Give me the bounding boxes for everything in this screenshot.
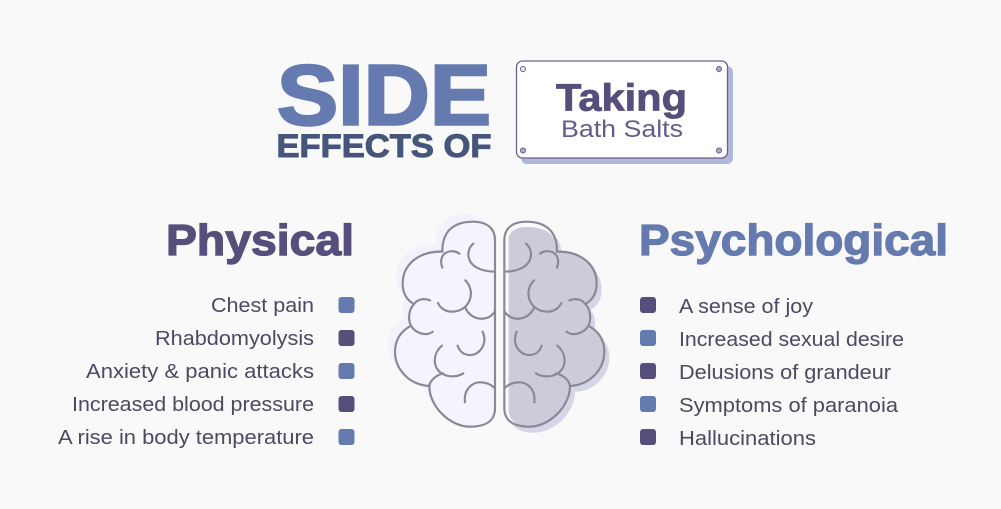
sign card: taking bath salts: Bath Salts: [561, 116, 683, 143]
sign card: taking bath salts: [516, 61, 733, 164]
list: psychological effects: Symptoms of paranoia: [679, 395, 899, 417]
list: psychological effects: [640, 296, 904, 450]
list: physical effects: A rise in body temperature: [58, 427, 314, 449]
title: side effects of: SIDE: [277, 48, 491, 144]
heading: physical: Physical: [166, 216, 354, 265]
sign card: taking bath salts: Taking: [556, 78, 687, 120]
list: physical effects: Chest pain: [211, 295, 314, 317]
title: side effects of: EFFECTS OF: [276, 128, 492, 164]
list: psychological effects: Hallucinations: [679, 428, 816, 450]
list: physical effects: Increased blood pressure: [72, 394, 314, 416]
icon: brain: [388, 214, 609, 433]
left hemisphere: [388, 214, 495, 427]
list: psychological effects: A sense of joy: [679, 296, 813, 318]
right hemisphere: [504, 222, 609, 433]
list: psychological effects: Increased sexual desire: [679, 329, 904, 351]
list: physical effects: Rhabdomyolysis: [155, 328, 314, 350]
list: physical effects: Anxiety & panic attacks: [86, 361, 314, 383]
list: psychological effects: Delusions of grandeur: [679, 362, 891, 384]
heading: psychological: Psychological: [639, 216, 948, 265]
list: physical effects: [58, 295, 354, 449]
